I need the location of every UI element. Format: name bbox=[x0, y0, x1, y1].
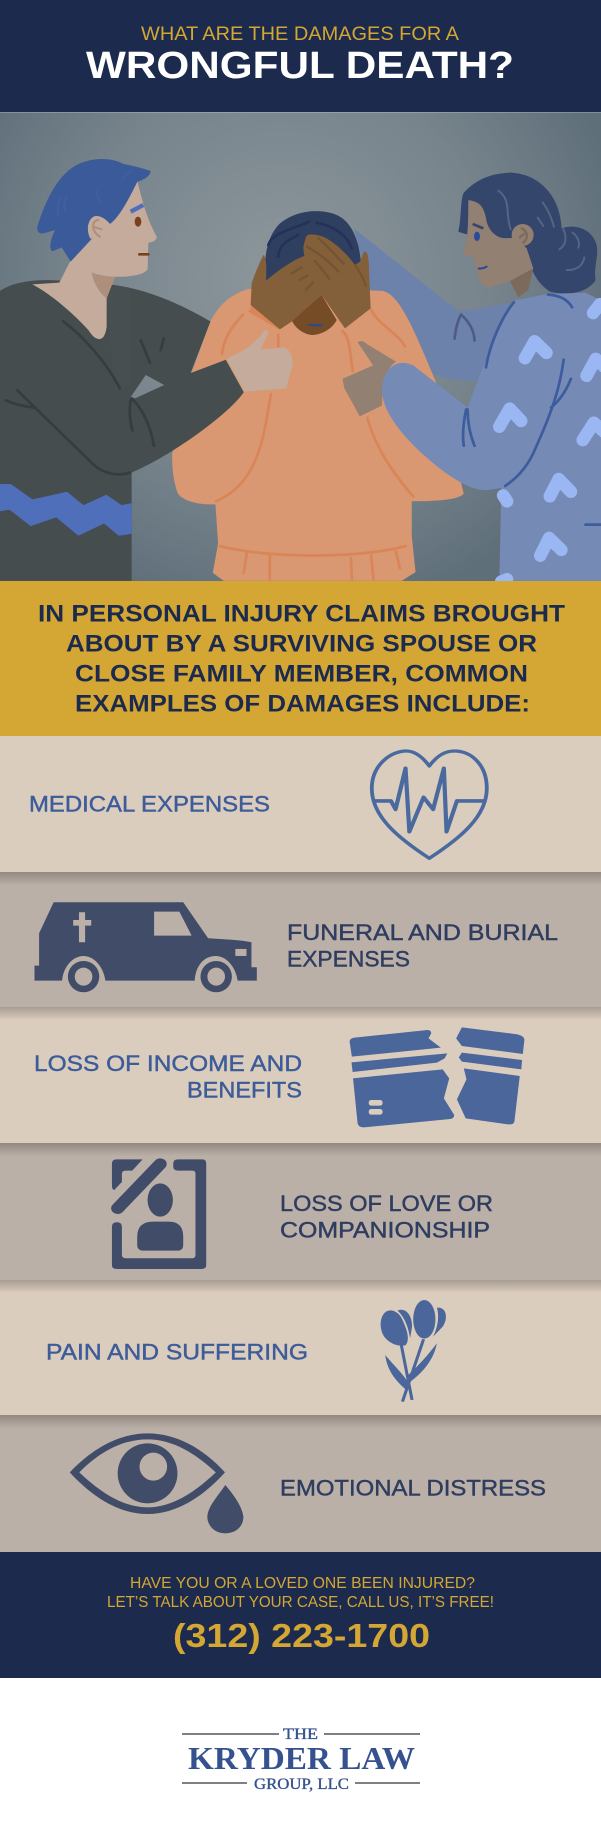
gold intro band bbox=[0, 581, 601, 736]
intro text: EXAMPLES OF DAMAGES INCLUDE: bbox=[75, 690, 530, 718]
center person: head and hands bbox=[248, 211, 371, 335]
label: funeral and burial expenses: EXPENSES bbox=[287, 946, 410, 972]
left man: thumbs-up hand bbox=[227, 330, 293, 392]
call-to-action text: LET’S TALK ABOUT YOUR CASE, CALL US, IT’S FREE! bbox=[107, 1594, 494, 1611]
call-to-action text: HAVE YOU OR A LOVED ONE BEEN INJURED? bbox=[130, 1575, 475, 1592]
center person: sweater bbox=[172, 289, 464, 581]
label: loss of income and benefits bbox=[34, 1051, 302, 1102]
phone number: (312) 223-1700 bbox=[173, 1617, 430, 1654]
header banner bbox=[0, 0, 601, 112]
call-to-action text bbox=[107, 1575, 494, 1611]
woman: blue patterned top bbox=[382, 293, 601, 582]
left man: sweater bbox=[0, 280, 244, 581]
label: funeral and burial expenses: FUNERAL AND BURIAL bbox=[287, 920, 558, 945]
illustration: grieving person comforted by two friends bbox=[0, 112, 601, 584]
icon: crying eye bbox=[70, 1433, 243, 1533]
logo: The Kryder Law Group: GROUP, LLC bbox=[254, 1776, 349, 1793]
woman: pointing hand bbox=[342, 341, 396, 416]
label: loss of income and benefits: BENEFITS bbox=[187, 1078, 302, 1102]
logo: The Kryder Law Group: THE bbox=[283, 1726, 318, 1743]
icon: torn credit card bbox=[350, 1027, 524, 1127]
icon: tulips bbox=[381, 1300, 446, 1402]
label: medical expenses: MEDICAL EXPENSES bbox=[29, 792, 270, 816]
label: emotional distress: EMOTIONAL DISTRESS bbox=[280, 1476, 546, 1500]
row: pain and suffering bbox=[0, 1280, 601, 1415]
woman: head and hair bbox=[458, 173, 597, 297]
chevron pattern bbox=[499, 304, 601, 582]
row: funeral and burial expenses bbox=[0, 872, 601, 1007]
icon: heart with heartbeat bbox=[372, 751, 487, 858]
label: loss of love or companionship: COMPANIONSHIP bbox=[280, 1218, 490, 1242]
header subtitle: WHAT ARE THE DAMAGES FOR A bbox=[141, 23, 459, 45]
label: pain and suffering: PAIN AND SUFFERING bbox=[46, 1340, 308, 1364]
icon: broken photo frame bbox=[112, 1159, 206, 1269]
row: medical expenses bbox=[0, 736, 601, 872]
row: emotional distress bbox=[0, 1415, 601, 1552]
intro text: ABOUT BY A SURVIVING SPOUSE OR bbox=[66, 630, 537, 658]
woman's rear arm bbox=[354, 228, 515, 383]
row: loss of income and benefits bbox=[0, 1007, 601, 1143]
row: loss of love or companionship bbox=[0, 1143, 601, 1280]
left man: sweater zigzag bbox=[0, 484, 132, 536]
label: loss of love or companionship bbox=[280, 1191, 493, 1242]
intro text: IN PERSONAL INJURY CLAIMS BROUGHT bbox=[38, 600, 565, 628]
label: loss of love or companionship: LOSS OF LOVE OR bbox=[280, 1191, 493, 1216]
logo: The Kryder Law Group bbox=[0, 1678, 601, 1836]
footer call to action bbox=[0, 1552, 601, 1678]
label: funeral and burial expenses bbox=[287, 920, 558, 972]
intro text: CLOSE FAMILY MEMBER, COMMON bbox=[75, 660, 528, 688]
icon: hearse bbox=[34, 902, 257, 992]
header title: WRONGFUL DEATH? bbox=[86, 45, 514, 87]
intro text bbox=[38, 600, 565, 718]
label: loss of income and benefits: LOSS OF INCOME AND bbox=[34, 1051, 302, 1076]
left man: head bbox=[32, 159, 157, 339]
logo: The Kryder Law Group: KRYDER LAW bbox=[188, 1740, 415, 1776]
